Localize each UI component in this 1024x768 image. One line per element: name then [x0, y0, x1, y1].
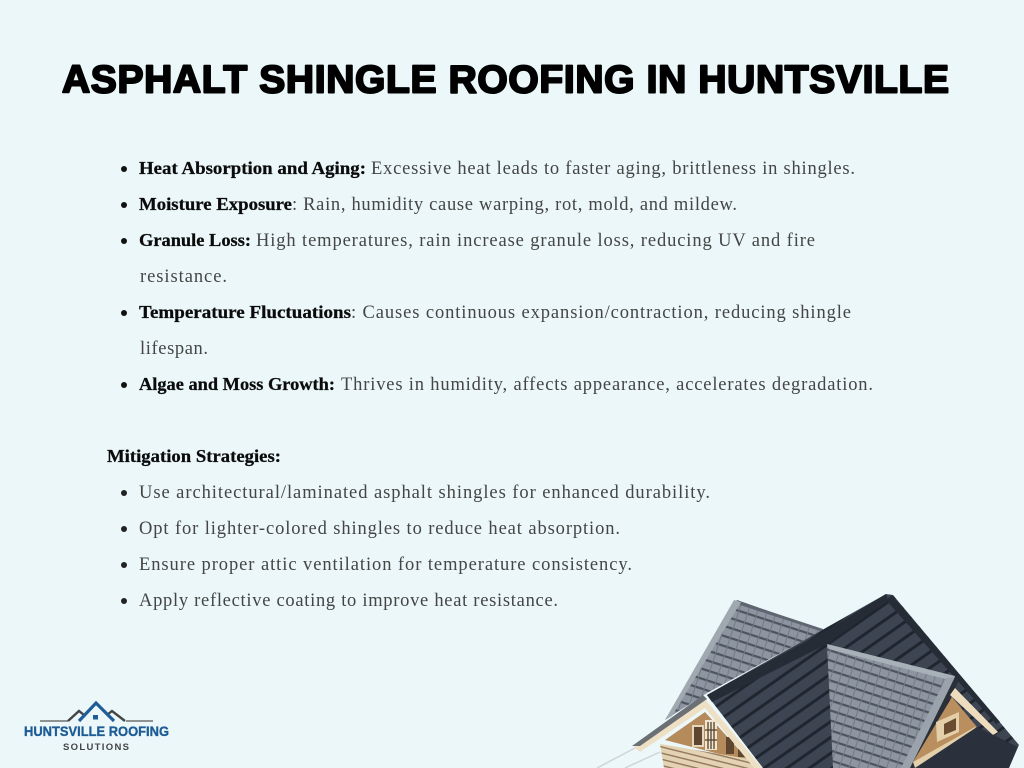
logo: Huntsville Roofing Solutions [24, 703, 169, 753]
item: granule loss: Granule Loss: [139, 230, 251, 250]
front gable interior [665, 712, 750, 762]
item: moisture exposure: Moisture Exposure [139, 194, 292, 214]
item: granule loss [121, 230, 815, 287]
item: algae and moss: Thrives in humidity, affects appearance, accelerates degradation. [341, 375, 873, 395]
back left roof [665, 600, 823, 720]
right gable [913, 697, 977, 762]
item: temperature fluctuations: lifespan. [140, 339, 208, 359]
item: algae and moss: Algae and Moss Growth: [139, 374, 335, 394]
front right roof edge [827, 644, 955, 681]
front right gray roof [827, 645, 953, 768]
right gable window [936, 712, 959, 742]
list: roofing challenges [121, 158, 873, 395]
illustration: house roof [597, 594, 1019, 768]
item: lighter shingles: Opt for lighter-colored shingles to reduce heat absorption. [139, 519, 620, 539]
item: moisture exposure: : Rain, humidity cause warping, rot, mold, and mildew. [292, 195, 737, 215]
icon: roof line [40, 703, 153, 721]
title: ASPHALT SHINGLE ROOFING IN HUNTSVILLE [62, 58, 949, 102]
front gable barge board [634, 699, 762, 768]
logo tagline: SOLUTIONS [63, 742, 129, 753]
logo name: HUNTSVILLE ROOFING [24, 724, 169, 739]
item: heat absorption: Heat Absorption and Aging: [139, 158, 366, 178]
right gable barge board [950, 688, 998, 735]
item: reflective coating: Apply reflective coating to improve heat resistance. [139, 591, 558, 611]
large dark roof [707, 594, 1019, 768]
heading: mitigation strategies: Mitigation Strategies: [107, 446, 281, 466]
item: temperature fluctuations [121, 302, 851, 359]
item: heat absorption: Excessive heat leads to faster aging, brittleness in shingles. [371, 159, 855, 179]
dark ridge band [707, 594, 888, 702]
item: attic ventilation: Ensure proper attic ventilation for temperature consistency. [139, 555, 632, 575]
item: granule loss: High temperatures, rain increase granule loss, reducing UV and fire [256, 231, 815, 251]
scaffold lines [597, 748, 660, 768]
list: mitigation strategies [121, 483, 710, 611]
log wall [660, 744, 760, 768]
gable windows [692, 720, 745, 757]
item: architectural shingles: Use architectural/laminated asphalt shingles for enhanced durability. [139, 483, 710, 503]
item: temperature fluctuations: Temperature Fluctuations [139, 302, 351, 322]
gable grey eave [632, 695, 707, 746]
item: granule loss: resistance. [140, 267, 227, 287]
item: moisture exposure [121, 194, 737, 215]
right lower dark roof [915, 727, 1018, 768]
item: algae and moss [121, 374, 873, 395]
back left roof edge [665, 600, 741, 720]
item: temperature fluctuations: : Causes continuous expansion/contraction, reducing shingle [351, 303, 851, 323]
item: heat absorption [121, 158, 855, 179]
